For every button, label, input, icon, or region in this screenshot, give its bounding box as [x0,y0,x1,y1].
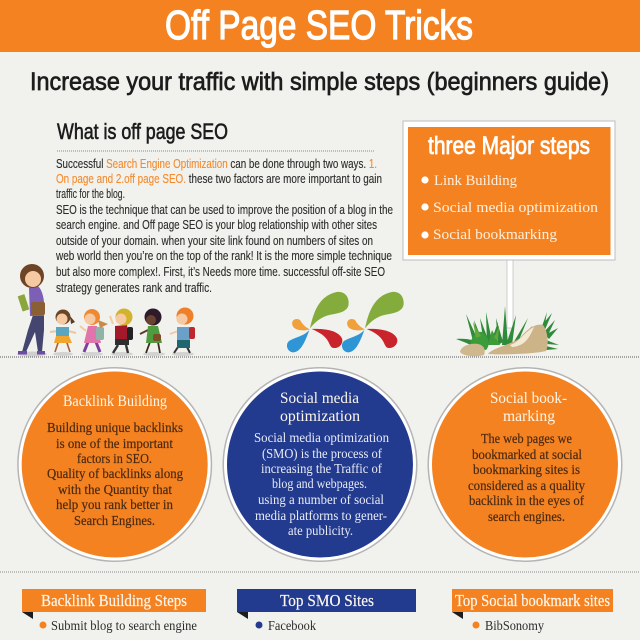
body text: search engine. and Off page SEO is your blog relationship with other sites [56,217,377,232]
circle heading: Backlink Building [63,393,167,410]
circle heading: optimization [280,408,360,425]
teacher [17,264,47,356]
circle body [47,421,183,529]
panel: top social bookmark sites [452,589,613,634]
circle body: considered as a quality [468,479,585,494]
child 3 [110,308,133,356]
icon: grass and rocks [456,306,559,356]
banner label: Top SMO Sites [280,591,374,610]
circle body: increasing the Traffic of [261,462,382,477]
panel: backlink building steps [22,589,206,634]
circle body: factors in SEO. [77,452,152,467]
banner label: Backlink Building Steps [41,591,187,610]
circle body: bookmarking sites is [473,463,580,478]
circle body: The web pages we [481,432,572,447]
banner label: Top Social bookmark sites [455,591,610,610]
body text [55,156,393,295]
title: Off Page SEO Tricks [165,2,473,48]
child 5 [170,308,195,356]
circle body: with the Quantity that [58,483,172,498]
panel: social media optimization circle [222,367,418,562]
circle heading: Social book- [490,390,567,407]
circle body [468,432,585,525]
illustration: teacher and children [17,264,195,356]
subtitle: Increase your traffic with simple steps (beginners guide) [30,68,609,96]
circle body: is one of the important [56,437,173,452]
circle body: search engines. [488,510,565,525]
body text: Successful Search Engine Optimization can be done through two ways. 1. [56,156,377,171]
circle body: backlink in the eyes of [469,494,584,509]
body text: web world then you’re on the top of the rank! It is the more simple technique [55,248,392,263]
signpost: three major steps [403,121,615,328]
panel: top SMO sites [237,589,416,634]
circle body: (SMO) is the process of [262,447,382,462]
body text: On page and 2.off page SEO. these two factors are more important to gain [56,171,382,186]
circle body: ate publicity. [288,524,353,539]
circle heading [280,390,360,425]
panel: what is off page SEO [55,119,393,295]
child 2 [80,309,108,356]
circle body: help you rank better in [56,498,173,513]
body text: outside of your domain. when your site link found on numbers of sites on [56,233,373,248]
circle heading: Social media [280,390,359,407]
body text: strategy generates rank and traffic. [56,280,212,295]
circle heading: marking [503,408,555,425]
sign list: Link Building [434,173,517,189]
circle body: media platforms to gener- [255,509,387,524]
circle body: using a number of social [258,493,384,508]
circle body: blog and webpages. [272,477,367,492]
circle body [254,431,389,539]
sign heading: three Major steps [428,132,590,160]
logo right [342,292,404,352]
heading: What is off page SEO [57,119,228,144]
header band [0,0,640,54]
list item: Facebook [268,619,316,634]
panel: social bookmarking circle [428,367,622,562]
body text: traffic for the blog. [56,186,125,201]
sign list: Social bookmarking [433,227,558,243]
circle body: Search Engines. [74,514,155,529]
body text: SEO is the technique that can be used to improve the position of a blog in the [56,202,393,217]
circle body: Quality of backlinks along [47,467,183,482]
circle body: Social media optimization [254,431,389,446]
circle body: bookmarked at social [472,448,582,463]
sign list [421,173,599,243]
list item: BibSonomy [485,619,544,634]
list item: Submit blog to search engine [51,619,197,634]
icon: colour petal logos [287,292,404,352]
circle heading [490,390,567,425]
child 1 [50,310,76,356]
circle body: Building unique backlinks [47,421,183,436]
logo left [287,292,349,352]
panel: backlink building circle [17,367,212,562]
body text: but also more complex!. First, it’s Needs more time. successful off-site SEO [56,264,385,279]
sign list: Social media optimization [433,200,599,216]
child 4 [140,308,165,356]
